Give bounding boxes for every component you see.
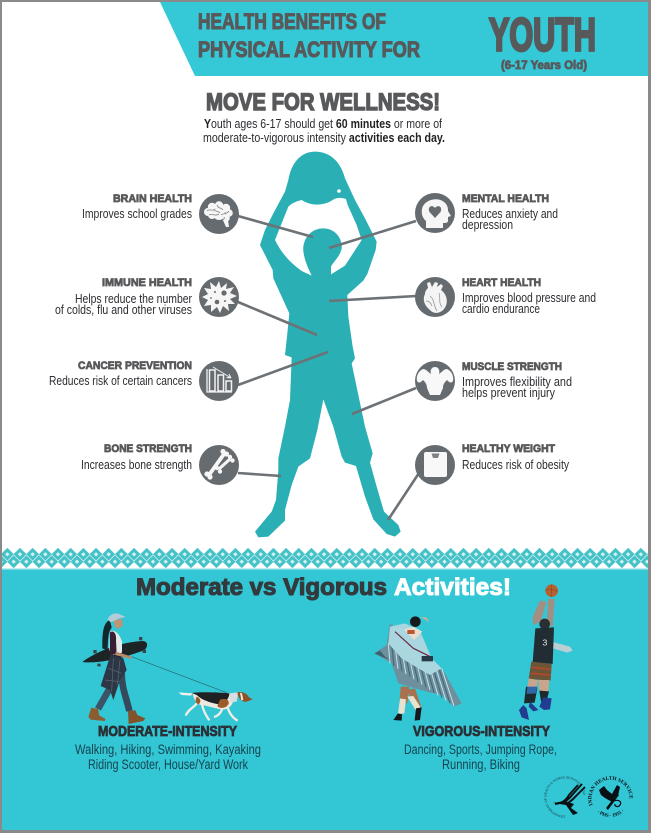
- legs: [399, 687, 422, 712]
- benefit: cancer prevention: CANCER PREVENTION: [78, 360, 192, 372]
- vigorous-intensity label: Dancing, Sports, Jumping Rope,: [404, 742, 557, 757]
- photo: girl walking dog: [82, 613, 253, 724]
- line: heart: [329, 296, 416, 301]
- leash: [132, 657, 227, 693]
- benefit: brain health: [82, 193, 239, 234]
- icon: declining chart: [199, 361, 239, 401]
- audience: youth: YOUTH: [489, 8, 596, 60]
- benefit: mental health: [415, 193, 558, 233]
- panel: activities: [2, 568, 648, 830]
- header title: PHYSICAL ACTIVITY FOR: [198, 37, 420, 62]
- line: brain: [238, 216, 313, 237]
- longboard: [82, 641, 147, 662]
- head: [539, 619, 550, 629]
- moderate-intensity label: MODERATE-INTENSITY: [98, 723, 237, 740]
- line: mental: [329, 221, 416, 248]
- benefit: brain health: BRAIN HEALTH: [113, 193, 192, 205]
- face: [113, 619, 123, 628]
- fringe: [374, 623, 462, 707]
- line: bone: [238, 473, 281, 476]
- vigorous-intensity label: [404, 723, 557, 772]
- regalia shorts: [529, 662, 552, 681]
- legs: [98, 687, 111, 709]
- benefit: brain health: Improves school grades: [82, 207, 192, 221]
- activities heading: Activities!: [394, 574, 511, 601]
- line: cancer: [238, 352, 328, 385]
- pointer lines: [238, 216, 419, 520]
- intro text: [203, 117, 445, 145]
- photo: fancy shawl dancer: [374, 616, 462, 721]
- logo: Indian Health Service: INDIAN HEALTH SERVICE: [588, 776, 633, 806]
- shawl: [388, 623, 442, 675]
- benefit: heart health: Improves blood pressure and: [462, 291, 596, 305]
- intro text: moderate-to-vigorous intensity activities each day.: [203, 131, 445, 145]
- photo: basketball player: [519, 584, 573, 720]
- ball: [545, 584, 558, 597]
- benefit: muscle strength: [415, 361, 572, 401]
- benefit: mental health: MENTAL HEALTH: [462, 193, 549, 205]
- benefit: immune health: Helps reduce the number: [75, 292, 192, 306]
- benefit: immune health: [55, 277, 239, 317]
- arm: [115, 652, 132, 659]
- icon: muscular torso: [415, 361, 455, 401]
- icon: anatomical heart: [415, 277, 455, 317]
- benefit: immune health: of colds, flu and other viruses: [55, 303, 192, 317]
- benefit: bone strength: [81, 443, 239, 485]
- line: immune: [238, 302, 317, 335]
- benefit: muscle strength: MUSCLE STRENGTH: [462, 361, 562, 373]
- line: weight: [388, 473, 419, 520]
- age range: (6-17 Years Old): [501, 60, 587, 72]
- header title: HEALTH BENEFITS OF: [198, 9, 386, 34]
- head: [410, 616, 421, 627]
- activities heading: Moderate vs Vigorous: [136, 574, 387, 601]
- heading: move for wellness: MOVE FOR WELLNESS!: [206, 89, 440, 116]
- arms: [533, 598, 555, 627]
- logo: Indian Health Service: · PHS - 1955 ·: [598, 810, 623, 817]
- icon: head with heart: [415, 193, 455, 233]
- benefit: cancer prevention: [49, 360, 239, 401]
- benefit: bone strength: BONE STRENGTH: [104, 443, 192, 455]
- benefit: immune health: IMMUNE HEALTH: [102, 277, 192, 289]
- cap: [108, 613, 126, 622]
- benefit: heart health: [415, 277, 596, 317]
- moderate-intensity label: Walking, Hiking, Swimming, Kayaking: [75, 742, 261, 757]
- dog: [178, 692, 253, 721]
- child silhouette with ball: [255, 152, 401, 537]
- plaid skirt: [101, 654, 127, 700]
- shoes: [519, 697, 552, 720]
- ball highlight: [337, 189, 341, 193]
- benefit: muscle strength: Improves flexibility and: [462, 375, 572, 389]
- benefit: mental health: Reduces anxiety and: [462, 207, 558, 221]
- intro text: Youth ages 6-17 should get 60 minutes or more of: [204, 117, 442, 131]
- icon: scale: [415, 445, 455, 485]
- activities heading: [136, 574, 511, 601]
- header title: [198, 9, 420, 62]
- line: muscle: [352, 388, 416, 414]
- benefit: healthy weight: HEALTHY WEIGHT: [462, 443, 555, 455]
- benefit: mental health: depression: [462, 218, 513, 232]
- moderate-intensity label: Riding Scooter, House/Yard Work: [88, 757, 248, 772]
- number: 3: [542, 637, 548, 647]
- vigorous-intensity label: Running, Biking: [442, 757, 520, 772]
- thighs: [527, 678, 549, 693]
- logo: HHS: DEPARTMENT OF HEALTH & HUMAN SERVICES · USA: [544, 776, 586, 818]
- boots: [88, 708, 106, 721]
- benefit: heart health: HEART HEALTH: [462, 277, 541, 289]
- header banner: [160, 2, 648, 76]
- side arm: [553, 642, 573, 653]
- icon: virus: [199, 277, 239, 317]
- icon: bones: [199, 445, 239, 485]
- vigorous-intensity label: VIGOROUS-INTENSITY: [413, 723, 550, 740]
- icon: brain: [199, 194, 239, 234]
- benefit: muscle strength: helps prevent injury: [462, 386, 556, 400]
- benefit: cancer prevention: Reduces risk of certain cancers: [49, 374, 192, 388]
- benefit: healthy weight: [415, 443, 570, 485]
- benefit: healthy weight: Reduces risk of obesity: [462, 458, 570, 472]
- hair: [102, 620, 112, 650]
- jersey: [533, 627, 554, 664]
- benefit: heart health: cardio endurance: [462, 302, 540, 316]
- pattern band: [2, 548, 648, 568]
- moderate-intensity label: [75, 723, 261, 772]
- torso: [109, 631, 122, 655]
- benefit: bone strength: Increases bone strength: [81, 458, 192, 472]
- lower legs: [524, 687, 549, 703]
